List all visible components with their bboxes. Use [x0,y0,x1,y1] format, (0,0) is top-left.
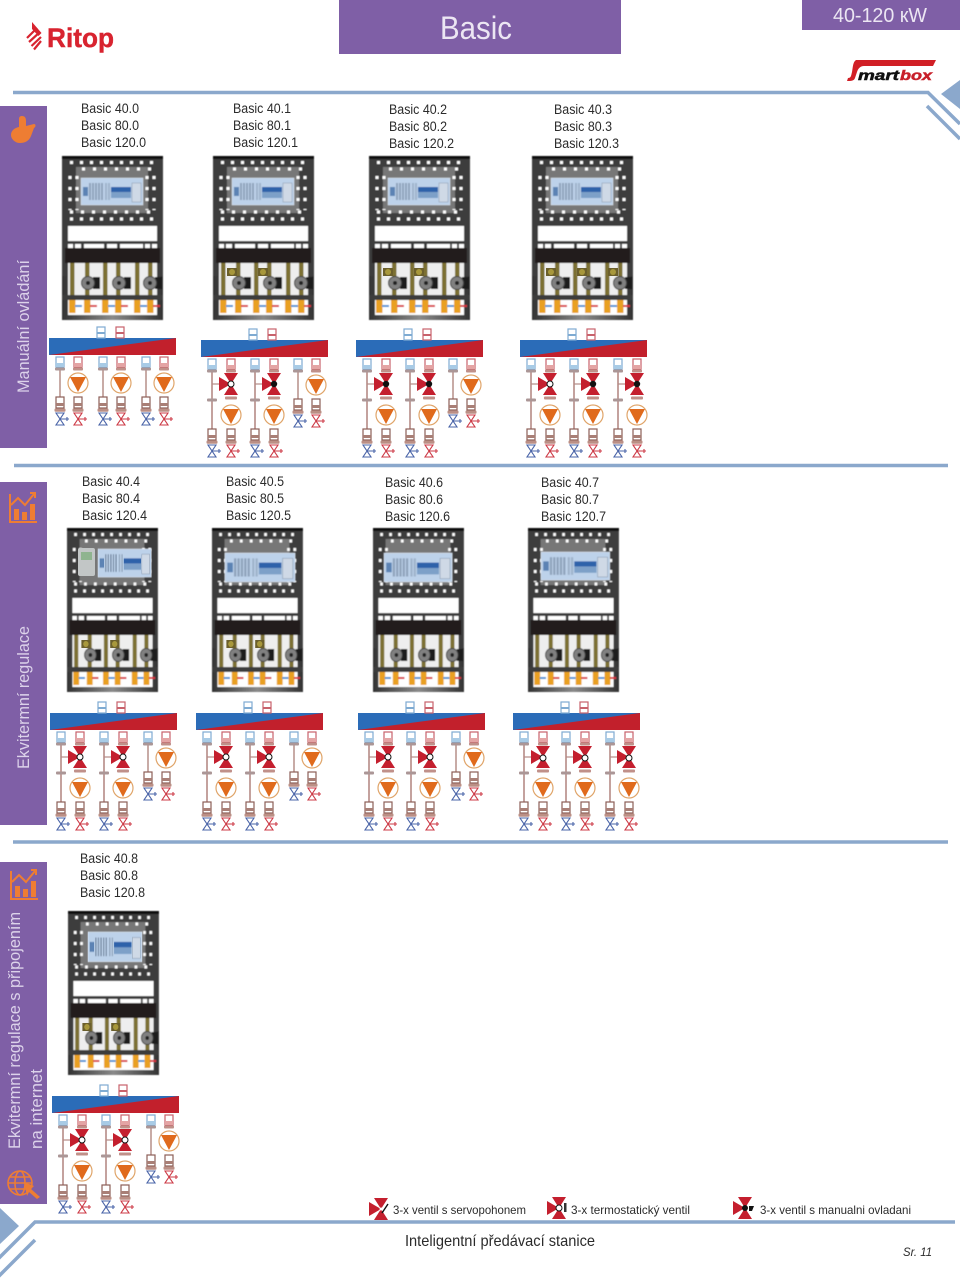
label: manual control: Manuální ovládání [14,260,33,393]
model names [81,101,146,150]
model names [82,474,147,523]
model names: Basic 120.8 [80,885,145,900]
hydraulic schematic [49,327,176,425]
logo: Smartbox: box [900,67,934,83]
title banner: Basic [339,0,621,54]
legend: servo valve: 3-x ventil s servopohonem [393,1203,526,1217]
model names: Basic 80.8 [80,868,138,883]
hydraulic schematic [201,329,328,457]
model names [233,101,298,150]
unit: Basic 40.4 [50,474,177,830]
model names [554,102,619,151]
model names: Basic 40.2 [389,102,447,117]
model names: Basic 40.7 [541,475,599,490]
label: weather control with internet [5,912,46,1149]
cabinet photo [532,156,633,320]
panel: manual control [0,106,47,448]
unit: Basic 40.1 [201,101,328,457]
model names: Basic 40.0 [81,101,139,116]
model names: Basic 40.8 [80,851,138,866]
panel: weather control with internet [0,862,47,1204]
unit: Basic 40.0 [49,101,176,425]
model names: Basic 80.5 [226,491,284,506]
model names: Basic 120.3 [554,136,619,151]
model names [226,474,291,523]
unit: Basic 40.3 [520,102,647,457]
logo: Ritop: Ritop [47,23,114,53]
model names: Basic 40.4 [82,474,140,489]
model names: Basic 80.3 [554,119,612,134]
model names [80,851,145,900]
power range banner [802,0,960,30]
model names: Basic 80.6 [385,492,443,507]
icon: chart [11,870,38,899]
legend: servo valve [369,1198,526,1220]
label: weather control: Ekvitermní regulace [14,626,33,769]
cabinet photo [373,528,464,692]
unit: Basic 40.8 [52,851,179,1213]
model names [385,475,450,524]
panel: weather control [0,482,47,825]
page number: Sr. 11 [903,1247,932,1259]
model names: Basic 40.3 [554,102,612,117]
model names: Basic 120.5 [226,508,291,523]
hydraulic schematic [356,329,483,457]
model names: Basic 80.0 [81,118,139,133]
legend: thermostatic valve: 3-x termostatický ventil [571,1203,690,1217]
cabinet photo [62,156,163,320]
power range banner: 40-120 кW [833,5,927,27]
model names: Basic 120.7 [541,509,606,524]
legend: thermostatic valve [547,1197,690,1219]
hydraulic schematic [358,702,485,830]
footer title: Inteligentní předávací stanice [405,1233,595,1250]
hydraulic schematic [196,702,323,830]
legend: manual valve [733,1197,911,1219]
label: weather control with internet: na internet [27,1069,46,1149]
icon: hand [11,116,36,143]
model names: Basic 40.5 [226,474,284,489]
title banner: Basic: Basic [440,10,512,46]
hydraulic schematic [513,702,640,830]
model names [389,102,454,151]
logo: Smartbox [847,60,936,83]
model names: Basic 80.1 [233,118,291,133]
cabinet photo [528,528,619,692]
logo: Smartbox: mart [858,67,901,83]
cabinet photo [212,528,303,692]
model names: Basic 120.2 [389,136,454,151]
model names: Basic 120.1 [233,135,298,150]
model names: Basic 80.7 [541,492,599,507]
model names: Basic 80.4 [82,491,140,506]
model names: Basic 120.0 [81,135,146,150]
label: weather control with internet: Ekvitermní regulace s připojením [5,912,24,1149]
unit: Basic 40.6 [358,475,485,830]
cabinet photo [68,911,159,1075]
model names: Basic 120.6 [385,509,450,524]
model names: Basic 120.4 [82,508,147,523]
legend: manual valve: 3-x ventil s manualni ovladani [760,1203,911,1217]
model names [541,475,606,524]
model names: Basic 40.6 [385,475,443,490]
hydraulic schematic [520,329,647,457]
cabinet photo [67,528,158,692]
icon: globe with cursor [8,1171,40,1199]
hydraulic schematic [50,702,177,830]
cabinet photo [369,156,470,320]
unit: Basic 40.7 [513,475,640,830]
model names: Basic 80.2 [389,119,447,134]
icon: chart [10,493,37,522]
unit: Basic 40.5 [196,474,323,830]
model names: Basic 40.1 [233,101,291,116]
hydraulic schematic [52,1085,179,1213]
cabinet photo [213,156,314,320]
unit: Basic 40.2 [356,102,483,457]
